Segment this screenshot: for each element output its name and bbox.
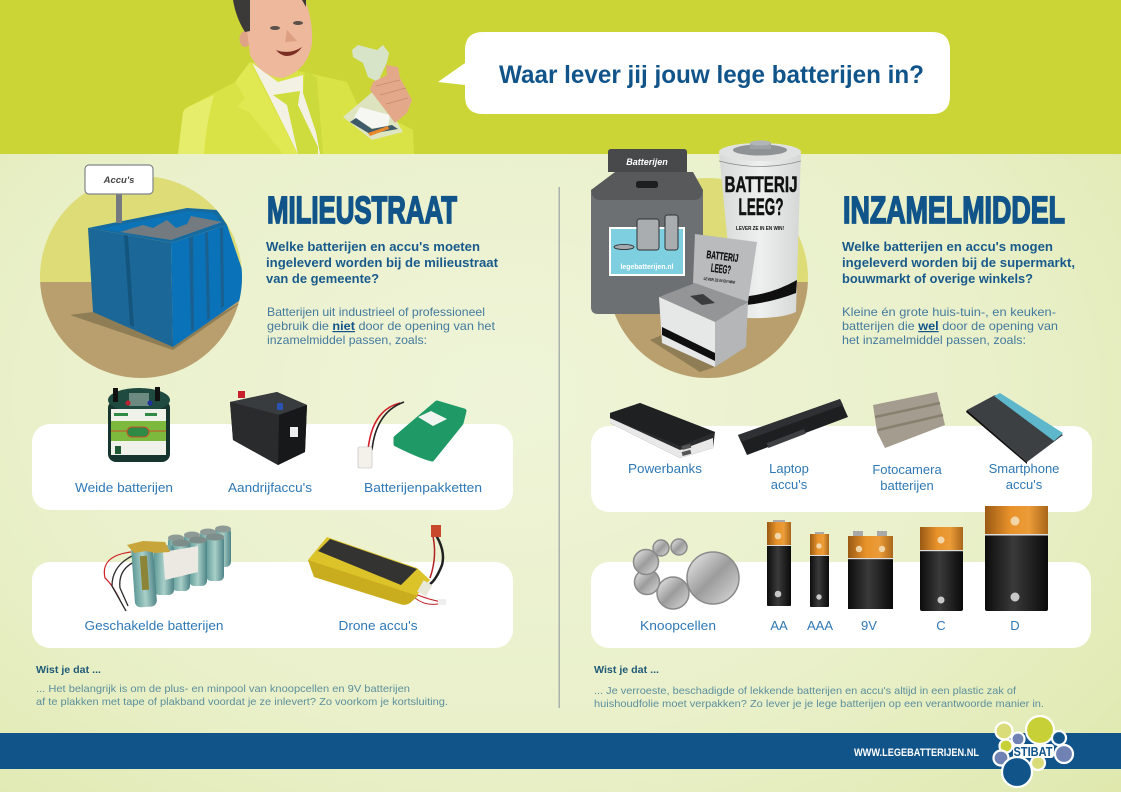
label: Drone accu's (338, 618, 418, 633)
footer url: WWW.LEGEBATTERIJEN.NL (854, 747, 979, 759)
body text: Milieustraat: inzamelmiddel passen, zoals: (267, 333, 427, 347)
sign post (116, 194, 122, 223)
body text: Inzamelmiddel: het inzamelmiddel passen, zoals: (842, 333, 1026, 347)
label: Smartphone (989, 461, 1059, 476)
battery: D (985, 506, 1048, 611)
body text: Milieustraat: gebruik die niet door de opening van het (267, 319, 496, 333)
back row cells (168, 527, 231, 582)
product: Smartphone accu (966, 393, 1063, 464)
label: Batterijenpakketten (364, 480, 482, 495)
product: Laptop accu (738, 399, 848, 455)
panel: row 1 left (32, 424, 513, 510)
label: 9V (861, 618, 877, 633)
label: C (936, 618, 946, 633)
subheading: Milieustraat: van de gemeente? (266, 271, 379, 286)
hand (370, 65, 412, 123)
callout: Wist je dat left: af te plakken met tape of plakband voordat je ze inlevert? Zo voorkom je kortsluiting. (36, 696, 448, 708)
product: Knoopcellen (634, 539, 739, 609)
panel: row 1 right (591, 426, 1092, 512)
front row cells (131, 535, 224, 608)
panel: row 2 left (32, 562, 513, 648)
label (769, 461, 809, 492)
bin: small cardboard box (650, 234, 757, 372)
bin: small cardboard box: LEVER ZE IN EN WIN! (703, 276, 736, 285)
panel: row 2 right (591, 562, 1091, 648)
footer band (0, 733, 1121, 769)
sign: Accu's (85, 165, 153, 194)
body text: Milieustraat: Batterijen uit industrieel of professioneel (267, 305, 485, 319)
logo: Stibat: STIBAT (1014, 744, 1053, 759)
product: Weide batterijen (108, 387, 170, 462)
subheading: Inzamelmiddel (842, 239, 1075, 286)
tie (273, 91, 318, 154)
jacket (178, 62, 414, 154)
photo: man in lime suit holding bag of batteries (178, 0, 414, 154)
body text: Milieustraat (267, 305, 496, 347)
label: D (1010, 618, 1020, 633)
label (989, 461, 1059, 492)
product: Powerbank (610, 403, 715, 458)
illustration: container with Accu's sign (40, 165, 250, 387)
vertical divider (558, 187, 560, 708)
body text: Inzamelmiddel: batterijen die wel door de opening van (842, 319, 1058, 333)
callout: Wist je dat right: Wist je dat ... (594, 664, 659, 676)
body text: Inzamelmiddel (842, 305, 1058, 347)
bin: cylinder battery: LEVER ZE IN EN WIN! (736, 226, 784, 232)
subheading: Milieustraat: ingeleverd worden bij de milieustraat (266, 255, 499, 270)
callout: Wist je dat right: huishoudfolie moet verpakken? Zo lever je je lege batterijen op een verantwoorde manier in. (594, 698, 1044, 710)
product: Fotocamera batterij (873, 392, 945, 448)
right lapel (303, 70, 323, 154)
label: Weide batterijen (75, 480, 173, 495)
label: AAA (807, 618, 833, 633)
sign: Accu's: Accu's (103, 175, 134, 186)
bin: grey box with sticker: Batterijen (626, 157, 668, 167)
label: Powerbanks (628, 461, 703, 476)
speech bubble with title (438, 32, 950, 114)
battery: 9V (848, 531, 893, 609)
product: Batterijenpakketten (358, 402, 464, 468)
callout: Wist je dat right (594, 664, 1044, 710)
left lapel (235, 62, 298, 154)
logo: Stibat (994, 716, 1073, 787)
subheading: Milieustraat (266, 239, 499, 286)
label: accu's (771, 477, 808, 492)
label: Knoopcellen (640, 618, 716, 633)
heading: Milieustraat: MILIEUSTRAAT (267, 190, 457, 232)
subheading: Milieustraat: Welke batterijen en accu's moeten (266, 239, 480, 254)
label: Geschakelde batterijen (84, 618, 224, 633)
callout: Wist je dat left: Wist je dat ... (36, 664, 101, 676)
title: Waar lever jij jouw lege batterijen in? (499, 61, 924, 89)
bin: grey box with sticker (591, 149, 703, 314)
tape and wrapper (163, 546, 198, 580)
callout: Wist je dat right: ... Je verroeste, beschadigde of lekkende batterijen en accu's altijd in een plastic zak of (594, 685, 1016, 697)
battery: C (920, 527, 963, 611)
label: Laptop (769, 461, 809, 476)
label: Fotocamera (872, 462, 942, 477)
label: Aandrijfaccu's (228, 480, 313, 495)
bag (352, 45, 389, 82)
subheading: Inzamelmiddel: Welke batterijen en accu's mogen (842, 239, 1053, 254)
bin: cylinder battery: LEEG? (738, 194, 784, 221)
illustration: collection bins (591, 140, 808, 382)
bin: cylinder battery (719, 140, 801, 318)
label: batterijen (880, 478, 934, 493)
body text: Inzamelmiddel: Kleine én grote huis-tuin-, en keuken- (842, 305, 1056, 319)
header band (0, 0, 1121, 154)
product: Drone accu's (308, 525, 446, 605)
battery: AA (767, 520, 791, 606)
subheading: Inzamelmiddel: ingeleverd worden bij de supermarkt, (842, 255, 1075, 270)
label (872, 462, 942, 493)
callout: Wist je dat left: ... Het belangrijk is om de plus- en minpool van knoopcellen en 9V batterijen (36, 683, 410, 695)
subheading: Inzamelmiddel: bouwmarkt of overige winkels? (842, 271, 1033, 286)
shirt (252, 63, 322, 154)
head (240, 31, 250, 47)
bin: small cardboard box: BATTERIJ (706, 249, 739, 265)
product: Aandrijfaccu's (230, 391, 307, 465)
product: Geschakelde batterijen (104, 526, 231, 611)
bin: grey box with sticker: legebatterijen.nl (620, 262, 674, 271)
callout: Wist je dat left (36, 664, 448, 708)
battery: AAA (810, 532, 829, 607)
label: accu's (1006, 477, 1043, 492)
bin: cylinder battery: BATTERIJ (724, 172, 798, 197)
label: AA (770, 618, 788, 633)
bin: small cardboard box: LEEG? (710, 261, 732, 277)
